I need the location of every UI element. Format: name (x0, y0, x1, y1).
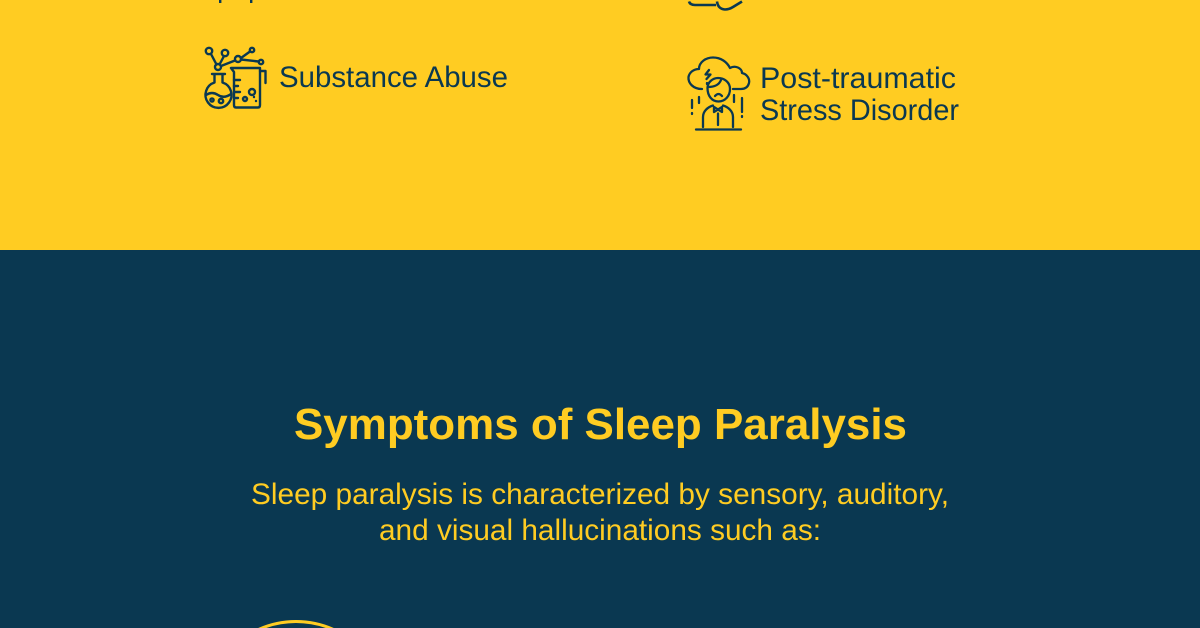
label: post-traumatic stress disorder: Post-traumatic (760, 62, 956, 95)
panel: symptoms (0, 250, 1200, 628)
panel: risk factors (0, 0, 1200, 250)
icon: post-traumatic stress disorder (688, 58, 749, 130)
icon: cropped circle (258, 620, 334, 628)
icon: cropped top right (689, 2, 742, 10)
icon: substance abuse (206, 48, 266, 108)
label: post-traumatic stress disorder (760, 62, 959, 127)
label: post-traumatic stress disorder: Stress Disorder (760, 94, 959, 127)
intro text (251, 478, 949, 547)
intro text: and visual hallucinations such as: (379, 514, 821, 547)
icon: cropped top left (219, 0, 252, 3)
intro text: Sleep paralysis is characterized by sensory, auditory, (251, 478, 949, 511)
heading: Symptoms of Sleep Paralysis (294, 400, 907, 449)
label: substance abuse: Substance Abuse (279, 61, 508, 94)
